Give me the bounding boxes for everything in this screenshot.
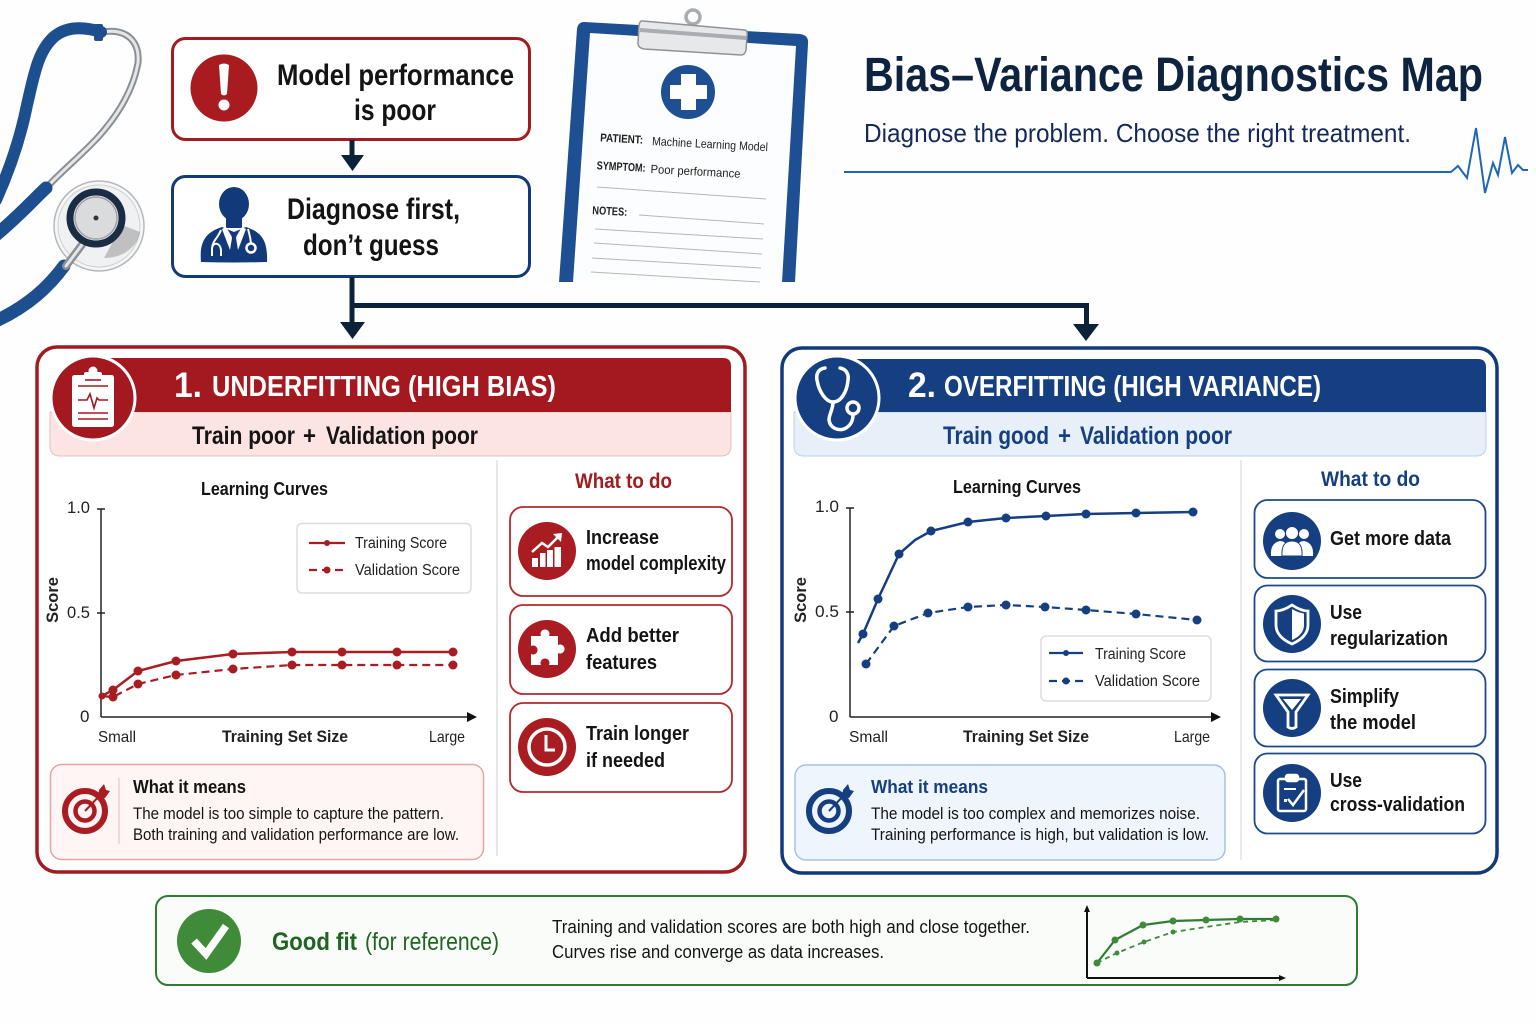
card: increase model complexity: Increase: [586, 526, 659, 549]
chart: overfitting learning curves: Score: [792, 577, 810, 623]
heading: underfitting: UNDERFITTING (HIGH BIAS): [212, 371, 556, 403]
icon: stethoscope illustration: [0, 24, 144, 321]
heading: underfitting: 1.: [174, 366, 202, 405]
chart: underfitting learning curves: [44, 478, 477, 746]
card: use regularization: Use: [1330, 601, 1362, 624]
text: model performance is poor: is poor: [354, 94, 436, 127]
text: clipboard form: Poor performance: [650, 162, 741, 181]
callout: what it means (overfitting): What it means: [871, 776, 988, 797]
panel: good fit reference: [156, 896, 1357, 985]
chart: underfitting learning curves: Learning Curves: [201, 478, 328, 499]
card: use cross-validation: Use: [1330, 769, 1362, 792]
icon: shield: [1276, 605, 1308, 644]
card: simplify the model: Simplify: [1330, 685, 1400, 708]
chart: overfitting learning curves: Learning Curves: [953, 476, 1081, 497]
card: train longer: if needed: [586, 749, 665, 772]
text: good fit description: [552, 917, 1030, 962]
training curve: [858, 508, 1198, 643]
chart: overfitting learning curves: 0.5: [815, 602, 839, 621]
card: add better features: features: [586, 651, 657, 674]
card: use regularization: regularization: [1330, 627, 1448, 650]
validation curve: [98, 660, 458, 702]
chart: overfitting learning curves: [792, 476, 1221, 746]
heading: good fit: Good fit: [272, 928, 358, 956]
icon: check mark: [177, 909, 241, 973]
text: clipboard form: NOTES:: [592, 205, 628, 219]
text: symptoms: +: [1058, 422, 1071, 450]
card: simplify the model: [1254, 670, 1486, 746]
chart legend: [1041, 636, 1211, 701]
icon: target: [809, 784, 854, 831]
chart legend: [297, 524, 471, 593]
card: get more data: [1254, 500, 1486, 578]
callout: diagnose first: [172, 176, 530, 276]
text: symptoms: Validation poor: [1080, 422, 1232, 450]
callout: what it means (overfitting): [795, 765, 1225, 860]
callout: what it means (underfitting): [50, 764, 484, 860]
chart: overfitting learning curves: 0: [829, 707, 838, 726]
heading: good fit: (for reference): [365, 928, 499, 956]
card: increase model complexity: [510, 507, 732, 596]
chart: overfitting learning curves: Large: [1174, 729, 1210, 746]
text: clipboard form: [592, 131, 768, 226]
panel: underfitting: [37, 347, 745, 872]
heading: overfitting: 2.: [908, 366, 936, 405]
heading: good fit: [272, 928, 499, 956]
card: use cross-validation: [1254, 754, 1486, 834]
chart: underfitting learning curves: 1.0: [67, 498, 90, 517]
text: symptoms: Validation poor: [326, 422, 478, 450]
training curve: [102, 648, 458, 696]
card: get more data: Get more data: [1330, 527, 1452, 550]
text: symptoms: [192, 422, 478, 450]
text: symptoms: Train good: [943, 422, 1049, 450]
text: symptoms: +: [303, 422, 316, 450]
icon: growth chart: [532, 533, 562, 567]
heading: overfitting: OVERFITTING (HIGH VARIANCE): [944, 371, 1321, 403]
callout: what it means (overfitting): The model is too complex and memorizes noise.: [871, 804, 1200, 823]
icon: medical cross: [661, 65, 715, 119]
chart: underfitting learning curves: 0: [80, 707, 89, 726]
text: model performance is poor: [277, 59, 514, 127]
chart: underfitting learning curves: Large: [429, 729, 465, 746]
chart legend: Training Score: [1095, 646, 1186, 663]
heading: underfitting: [174, 366, 556, 405]
arrow: poor to diagnose: [341, 140, 364, 171]
callout: model performance is poor: [172, 38, 530, 140]
heading: what to do: What to do: [575, 470, 672, 493]
chart legend: Training Score: [355, 535, 447, 552]
chart: overfitting learning curves: 1.0: [815, 497, 839, 516]
icon: target: [65, 784, 110, 831]
chart: overfitting learning curves: Training Set Size: [963, 727, 1089, 746]
callout: what it means (overfitting): Training performance is high, but validation is low.: [871, 825, 1209, 844]
header: underfitting band: [50, 356, 731, 456]
icon: doctor: [201, 187, 267, 262]
panel: overfitting: [782, 348, 1497, 873]
card: train longer: [510, 703, 732, 792]
icon: exclamation mark: [190, 54, 258, 122]
text: diagnose first: [287, 193, 460, 262]
text: clipboard form: Machine Learning Model: [652, 134, 768, 154]
header: overfitting band: [794, 356, 1486, 456]
card: add better features: [510, 605, 732, 694]
icon: funnel: [1276, 695, 1308, 728]
card: add better features: Add better: [586, 624, 679, 647]
validation curve: [862, 600, 1202, 668]
text: symptoms: Train poor: [192, 422, 295, 450]
card: simplify the model: the model: [1330, 711, 1416, 734]
callout: what it means (underfitting): The model is too simple to capture the pattern.: [133, 804, 444, 823]
icon: clipboard check: [1278, 775, 1306, 811]
icon: ECG divider line: [844, 128, 1528, 193]
card: increase model complexity: model complexity: [586, 552, 726, 575]
chart: overfitting learning curves: Small: [849, 729, 888, 746]
chart: underfitting learning curves: Training Set Size: [222, 727, 348, 746]
callout: what it means (underfitting): What it means: [133, 776, 246, 797]
card: train longer: Train longer: [586, 722, 689, 745]
chart: good fit mini curves: [1084, 905, 1286, 981]
icon: people: [1271, 526, 1313, 556]
icon: stethoscope: [817, 368, 859, 430]
text: model performance is poor: Model performance: [277, 59, 514, 92]
text: symptoms: [943, 422, 1232, 450]
illustration: clipboard: [559, 10, 808, 282]
text: clipboard form: PATIENT:: [600, 132, 643, 147]
heading: what to do: What to do: [1321, 468, 1420, 491]
icon: clipboard with pulse: [72, 366, 114, 427]
text: clipboard form: SYMPTOM:: [596, 160, 646, 175]
card: use cross-validation: cross-validation: [1330, 793, 1465, 816]
callout: what it means (underfitting): Both training and validation performance are low.: [133, 825, 459, 844]
text: diagnose first: don’t guess: [303, 229, 439, 262]
card: use regularization: [1254, 586, 1486, 662]
text: good fit description: Training and validation scores are both high and close together.: [552, 917, 1030, 937]
text: good fit description: Curves rise and converge as data increases.: [552, 942, 884, 962]
chart legend: Validation Score: [1095, 673, 1200, 690]
heading: overfitting: [908, 366, 1321, 405]
chart: underfitting learning curves: 0.5: [67, 603, 90, 622]
subtitle: Diagnose the problem. Choose the right treatment.: [864, 118, 1411, 148]
text: diagnose first: Diagnose first,: [287, 193, 460, 226]
icon: puzzle piece: [531, 629, 565, 665]
icon: clock: [529, 729, 565, 765]
chart: underfitting learning curves: Small: [98, 729, 136, 746]
chart legend: Validation Score: [355, 562, 460, 579]
chart: underfitting learning curves: Score: [44, 577, 62, 623]
arrow: branch to both diagnoses: [340, 277, 1099, 341]
